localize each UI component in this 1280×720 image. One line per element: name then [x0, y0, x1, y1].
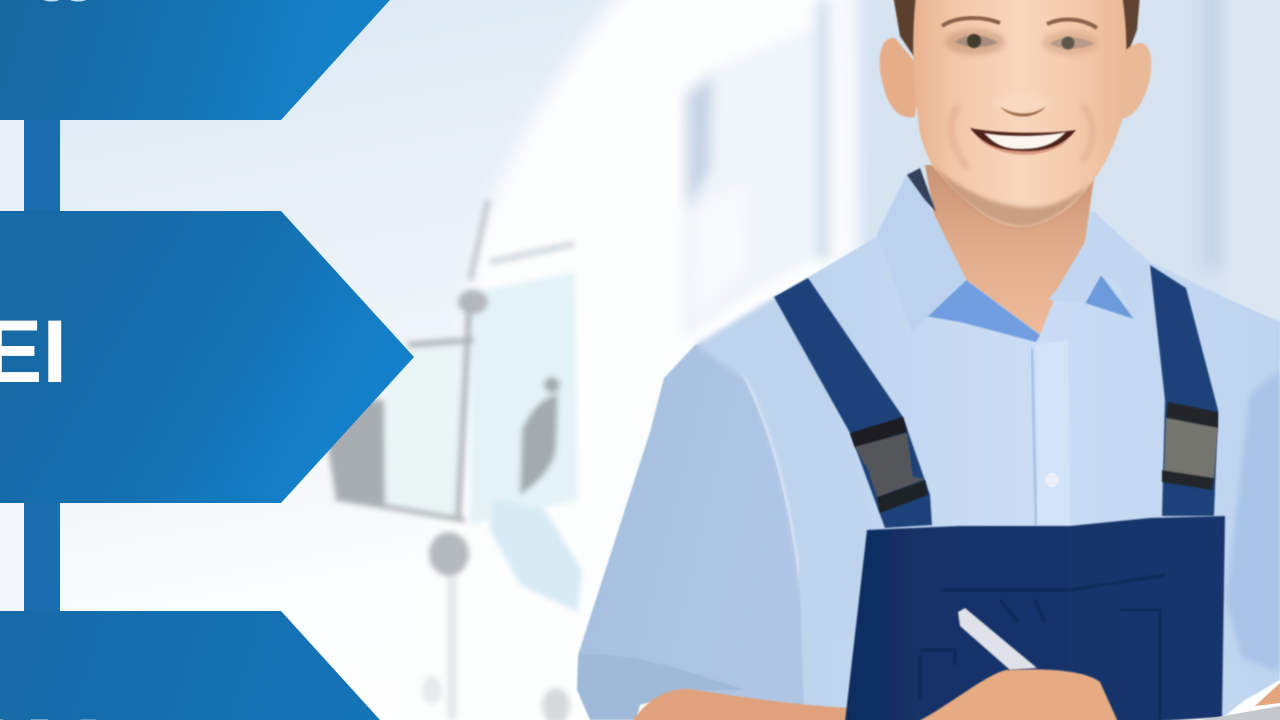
shirt collar shadow: [925, 280, 1040, 342]
eye sockets: [945, 29, 1005, 55]
person: technician in overalls: [577, 0, 1280, 720]
lower lip: [978, 138, 1068, 155]
shirt torso: [778, 211, 1280, 716]
shirt right collar: [1048, 211, 1150, 319]
head and face: [913, 0, 1126, 227]
shirt sleeve cuff: [577, 654, 745, 720]
bottom chevron banner: [0, 611, 380, 720]
clipboard edge: [1200, 706, 1280, 720]
connector bar: [24, 115, 60, 615]
top chevron banner: [0, 0, 390, 120]
background: blurred depot wall on the right: [826, 0, 1280, 360]
chevron banners column: [0, 0, 414, 720]
truck side window: [470, 272, 578, 525]
smile lines: [951, 105, 1093, 168]
right ear: [1118, 43, 1151, 118]
truck left mirror dark panel: [320, 400, 385, 508]
teeth: [984, 132, 1066, 149]
mirror arms: [408, 290, 474, 520]
left ear: [880, 38, 922, 117]
bib pocket seams: [920, 575, 1165, 720]
smile: [970, 128, 1076, 151]
truck door tinted panel: [490, 500, 582, 612]
truck left mirror glass: [385, 345, 462, 515]
eyebrows: [942, 18, 1097, 28]
shirt right sleeve shade: [1226, 370, 1280, 672]
right hand: [1255, 683, 1280, 706]
shirt button: [1045, 473, 1059, 487]
overall bib: [845, 516, 1225, 720]
right overall strap: [1150, 265, 1218, 516]
truck interior seat shadow: [520, 395, 558, 495]
shirt left collar: [877, 170, 966, 332]
nose shadow: [993, 94, 1050, 113]
mirror mount knobs: [458, 290, 488, 314]
mirror frame bar bottom: [335, 498, 465, 520]
left strap buckle: [850, 417, 928, 513]
light strips: [0, 120, 24, 211]
background: blurred white truck cab: [320, 0, 850, 720]
stubble shading: [932, 165, 1092, 227]
left eye: [955, 35, 998, 47]
forearm: [632, 689, 1000, 720]
middle chevron banner: [0, 211, 414, 503]
writing hand: [917, 669, 1118, 720]
right strap buckle: [1162, 402, 1218, 490]
pen: [958, 608, 1037, 670]
shirt left sleeve: [578, 344, 804, 716]
neck: [925, 165, 1095, 335]
left overall strap: [774, 278, 932, 528]
right eye: [1050, 37, 1094, 48]
shirt placket: [1036, 340, 1070, 525]
hair and ears behind head: [880, 0, 1151, 118]
